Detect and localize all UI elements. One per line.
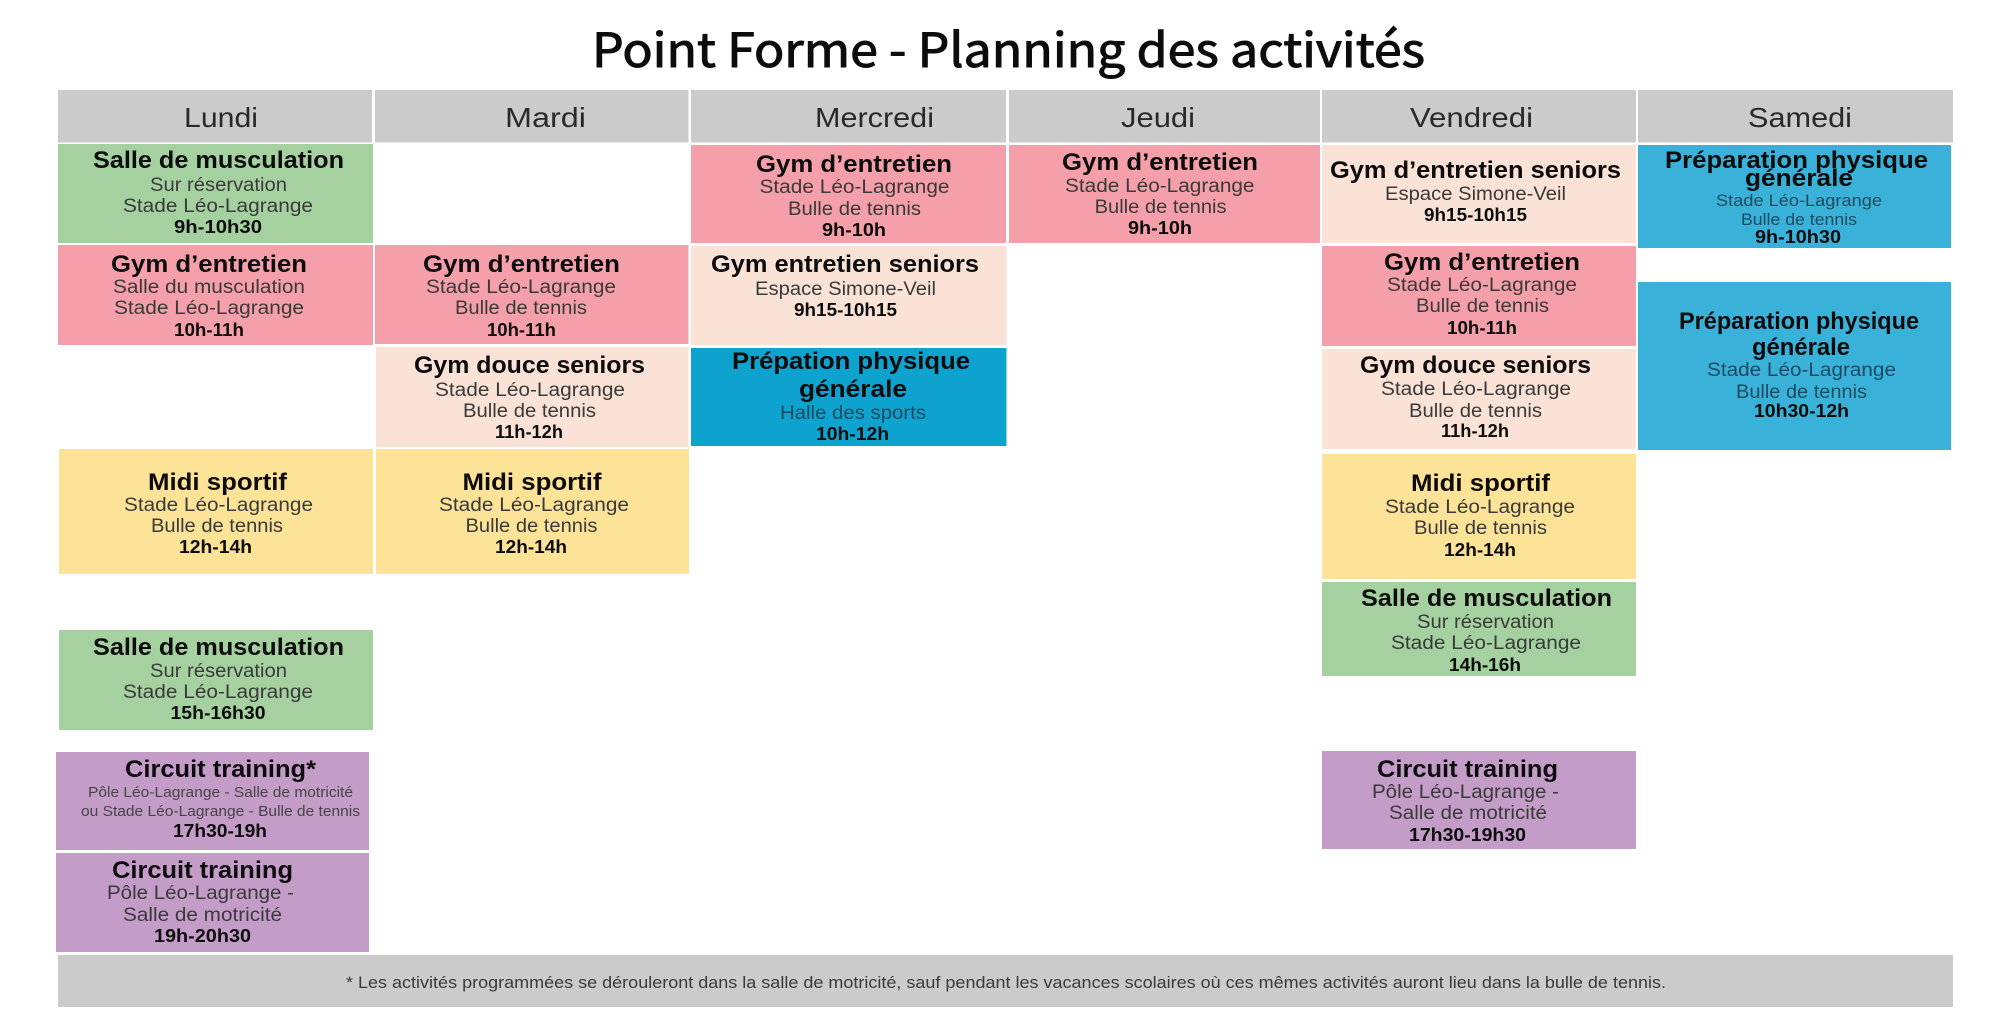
panel: Mercredi Gym d'entretien: 9h-10h bbox=[822, 219, 886, 240]
header: Samedi bbox=[1638, 90, 1953, 142]
panel: Vendredi Gym douce seniors: 11h-12h bbox=[1441, 420, 1509, 441]
panel: Mercredi Gym entretien seniors: Gym entretien seniors bbox=[711, 251, 979, 278]
panel: Vendredi Midi sportif: Stade Léo-Lagrange bbox=[1385, 497, 1575, 518]
panel: Mercredi Gym d'entretien: Bulle de tennis bbox=[788, 199, 921, 220]
panel: Mercredi Gym entretien seniors: 9h15-10h15 bbox=[794, 299, 897, 320]
panel: Mercredi Prépation physique générale: Prépation physique bbox=[732, 348, 970, 375]
panel: Vendredi Salle de musculation: Sur réservation bbox=[1417, 612, 1554, 633]
panel: Vendredi Midi sportif: Bulle de tennis bbox=[1414, 518, 1547, 539]
panel: Vendredi Circuit training bbox=[1322, 751, 1636, 849]
panel: Vendredi Gym d'entretien: Gym d’entretien bbox=[1384, 249, 1580, 276]
footnote bbox=[58, 955, 1953, 1007]
panel: Vendredi Salle de musculation: 14h-16h bbox=[1449, 654, 1521, 675]
header: Lundi: Lundi bbox=[184, 102, 258, 133]
header: Vendredi bbox=[1322, 90, 1636, 142]
panel: Samedi Préparation physique générale 9h: générale bbox=[1745, 165, 1853, 192]
panel: Samedi Préparation physique générale 10h30 bbox=[1638, 282, 1951, 450]
panel: Lundi Circuit training* bbox=[56, 752, 369, 850]
panel: Samedi Préparation physique générale 9h: Stade Léo-Lagrange bbox=[1716, 191, 1882, 210]
header: Mardi: Mardi bbox=[505, 102, 586, 133]
panel: Lundi Gym d'entretien: 10h-11h bbox=[174, 319, 244, 340]
panel: Vendredi Gym d'entretien seniors bbox=[1322, 145, 1636, 243]
panel: Mercredi Gym entretien seniors bbox=[691, 246, 1006, 345]
panel: Vendredi Gym d'entretien seniors: 9h15-10h15 bbox=[1424, 204, 1527, 225]
panel: Lundi Circuit training 19h: Salle de motricité bbox=[123, 905, 282, 926]
panel: Vendredi Gym d'entretien seniors: Espace Simone-Veil bbox=[1385, 184, 1566, 205]
panel: Mercredi Prépation physique générale: 10h-12h bbox=[816, 423, 889, 444]
panel: Mardi Gym d'entretien: Stade Léo-Lagrange bbox=[426, 277, 616, 298]
panel: Vendredi Gym d'entretien: Bulle de tennis bbox=[1416, 296, 1549, 317]
panel: Samedi Préparation physique générale 9h bbox=[1638, 145, 1951, 248]
panel: Mardi Gym d'entretien: 10h-11h bbox=[487, 319, 556, 340]
panel: Vendredi Circuit training: Pôle Léo-Lagrange - bbox=[1372, 782, 1559, 803]
panel: Jeudi Gym d'entretien: Gym d’entretien bbox=[1062, 149, 1258, 176]
panel: Samedi Préparation physique générale 10h30: générale bbox=[1752, 334, 1850, 361]
panel: Vendredi Salle de musculation: Salle de musculation bbox=[1361, 585, 1612, 612]
panel: Mardi Gym douce seniors: Stade Léo-Lagrange bbox=[435, 380, 625, 401]
panel: Vendredi Salle de musculation bbox=[1322, 582, 1636, 676]
panel: Mardi Midi sportif: Bulle de tennis bbox=[466, 516, 598, 537]
panel: Lundi Salle de musculation 15h: Stade Léo-Lagrange bbox=[123, 682, 313, 703]
panel: Vendredi Gym d'entretien: Stade Léo-Lagrange bbox=[1387, 275, 1577, 296]
footnote: * Les activités programmées se dérouleront dans la salle de motricité, sauf pendant les vacances scolaires où ces mêmes activités auront lieu dans la bulle de tennis. bbox=[346, 973, 1666, 992]
panel: Samedi Préparation physique générale 10h30: Stade Léo-Lagrange bbox=[1707, 360, 1896, 381]
panel: Lundi Salle de musculation 15h: Sur réservation bbox=[150, 661, 287, 682]
panel: Vendredi Midi sportif: 12h-14h bbox=[1444, 539, 1516, 560]
header: Vendredi: Vendredi bbox=[1410, 102, 1533, 133]
panel: Vendredi Gym d'entretien: 10h-11h bbox=[1447, 317, 1517, 338]
panel: Lundi Circuit training*: ou Stade Léo-Lagrange - Bulle de tennis bbox=[81, 803, 360, 820]
panel: Mardi Gym d'entretien: Gym d’entretien bbox=[423, 251, 620, 278]
panel: Jeudi Gym d'entretien: 9h-10h bbox=[1128, 217, 1192, 238]
panel: Vendredi Gym d'entretien bbox=[1322, 246, 1636, 346]
panel: Lundi Midi sportif: Stade Léo-Lagrange bbox=[124, 495, 313, 516]
panel: Samedi Préparation physique générale 10h30: Préparation physique bbox=[1679, 308, 1919, 335]
panel: Mardi Gym d'entretien: Bulle de tennis bbox=[455, 298, 587, 319]
panel: Lundi Salle de musculation 9h: 9h-10h30 bbox=[174, 216, 262, 237]
panel: Mercredi Gym d'entretien: Gym d’entretien bbox=[756, 151, 952, 178]
panel: Mercredi Gym entretien seniors: Espace Simone-Veil bbox=[755, 279, 936, 300]
panel: Lundi Salle de musculation 9h: Salle de musculation bbox=[93, 147, 344, 174]
panel: Lundi Salle de musculation 15h: 15h-16h30 bbox=[170, 702, 266, 723]
panel: Jeudi Gym d'entretien bbox=[1009, 145, 1320, 243]
panel: Lundi Salle de musculation 15h: Salle de musculation bbox=[93, 634, 344, 661]
header: Lundi bbox=[58, 90, 372, 142]
panel: Lundi Midi sportif: Midi sportif bbox=[148, 469, 288, 496]
panel: Lundi Gym d'entretien bbox=[58, 245, 373, 345]
panel: Samedi Préparation physique générale 9h: 9h-10h30 bbox=[1755, 226, 1841, 247]
header: Mercredi bbox=[691, 90, 1006, 142]
panel: Vendredi Gym d'entretien seniors: Gym d’entretien seniors bbox=[1330, 157, 1621, 184]
panel: Lundi Circuit training 19h: Pôle Léo-Lagrange - bbox=[107, 883, 294, 904]
header: Samedi: Samedi bbox=[1748, 102, 1852, 133]
panel: Lundi Gym d'entretien: Salle du musculation bbox=[113, 277, 305, 298]
panel: Mardi Midi sportif: Stade Léo-Lagrange bbox=[439, 495, 629, 516]
panel: Vendredi Midi sportif bbox=[1322, 454, 1636, 579]
panel: Samedi Préparation physique générale 9h: Bulle de tennis bbox=[1741, 210, 1857, 229]
panel: Vendredi Gym douce seniors: Gym douce seniors bbox=[1360, 352, 1591, 379]
panel: Lundi Circuit training 19h bbox=[56, 853, 369, 952]
panel: Lundi Midi sportif bbox=[59, 449, 373, 574]
panel: Vendredi Circuit training: 17h30-19h30 bbox=[1409, 824, 1526, 845]
panel: Lundi Salle de musculation 9h bbox=[58, 144, 373, 243]
header: Mercredi: Mercredi bbox=[815, 102, 934, 133]
panel: Lundi Circuit training*: Pôle Léo-Lagrange - Salle de motricité bbox=[88, 784, 353, 801]
panel: Lundi Salle de musculation 15h bbox=[59, 630, 373, 730]
panel: Vendredi Gym douce seniors: Stade Léo-Lagrange bbox=[1381, 379, 1571, 400]
panel: Lundi Circuit training*: 17h30-19h bbox=[173, 820, 267, 841]
panel: Samedi Préparation physique générale 10h30: 10h30-12h bbox=[1754, 400, 1849, 421]
panel: Mercredi Prépation physique générale: générale bbox=[799, 376, 907, 403]
panel: Mardi Gym douce seniors bbox=[376, 347, 688, 447]
panel: Mercredi Prépation physique générale: Halle des sports bbox=[780, 403, 926, 424]
panel: Vendredi Midi sportif: Midi sportif bbox=[1411, 470, 1551, 497]
panel: Mardi Gym douce seniors: Gym douce seniors bbox=[414, 352, 645, 379]
panel: Mardi Gym douce seniors: 11h-12h bbox=[495, 421, 563, 442]
title: Point Forme - Planning des activités bbox=[592, 12, 1425, 81]
panel: Lundi Midi sportif: Bulle de tennis bbox=[151, 516, 283, 537]
panel: Jeudi Gym d'entretien: Stade Léo-Lagrange bbox=[1065, 176, 1254, 197]
panel: Mardi Gym d'entretien bbox=[375, 245, 688, 344]
panel: Mardi Midi sportif: 12h-14h bbox=[495, 536, 567, 557]
header: Jeudi: Jeudi bbox=[1121, 102, 1195, 133]
panel: Lundi Circuit training 19h: Circuit training bbox=[112, 857, 293, 884]
panel: Lundi Circuit training 19h: 19h-20h30 bbox=[154, 925, 251, 946]
panel: Mardi Midi sportif: Midi sportif bbox=[462, 469, 603, 496]
panel: Jeudi Gym d'entretien: Bulle de tennis bbox=[1095, 197, 1227, 218]
panel: Lundi Salle de musculation 9h: Stade Léo-Lagrange bbox=[123, 196, 313, 217]
panel: Vendredi Gym douce seniors: Bulle de tennis bbox=[1409, 401, 1542, 422]
panel: Lundi Salle de musculation 9h: Sur réservation bbox=[150, 175, 287, 196]
panel: Vendredi Circuit training: Salle de motricité bbox=[1389, 803, 1547, 824]
panel: Vendredi Salle de musculation: Stade Léo-Lagrange bbox=[1391, 633, 1581, 654]
header: Jeudi bbox=[1009, 90, 1320, 142]
panel: Vendredi Circuit training: Circuit training bbox=[1377, 756, 1558, 783]
panel: Mercredi Gym d'entretien: Stade Léo-Lagrange bbox=[760, 177, 950, 198]
panel: Lundi Gym d'entretien: Gym d’entretien bbox=[111, 251, 307, 278]
header: Mardi bbox=[375, 90, 688, 142]
panel: Mercredi Prépation physique générale bbox=[691, 348, 1006, 446]
panel: Mardi Midi sportif bbox=[376, 449, 689, 574]
panel: Lundi Midi sportif: 12h-14h bbox=[179, 536, 252, 557]
panel: Mardi Gym douce seniors: Bulle de tennis bbox=[463, 401, 596, 422]
panel: Samedi Préparation physique générale 9h: Préparation physique bbox=[1665, 147, 1928, 174]
panel: Lundi Gym d'entretien: Stade Léo-Lagrange bbox=[114, 298, 304, 319]
panel: Mercredi Gym d'entretien bbox=[691, 145, 1006, 243]
panel: Lundi Circuit training*: Circuit training* bbox=[125, 756, 317, 783]
panel: Samedi Préparation physique générale 10h30: Bulle de tennis bbox=[1736, 382, 1867, 403]
panel: Vendredi Gym douce seniors bbox=[1322, 349, 1636, 449]
